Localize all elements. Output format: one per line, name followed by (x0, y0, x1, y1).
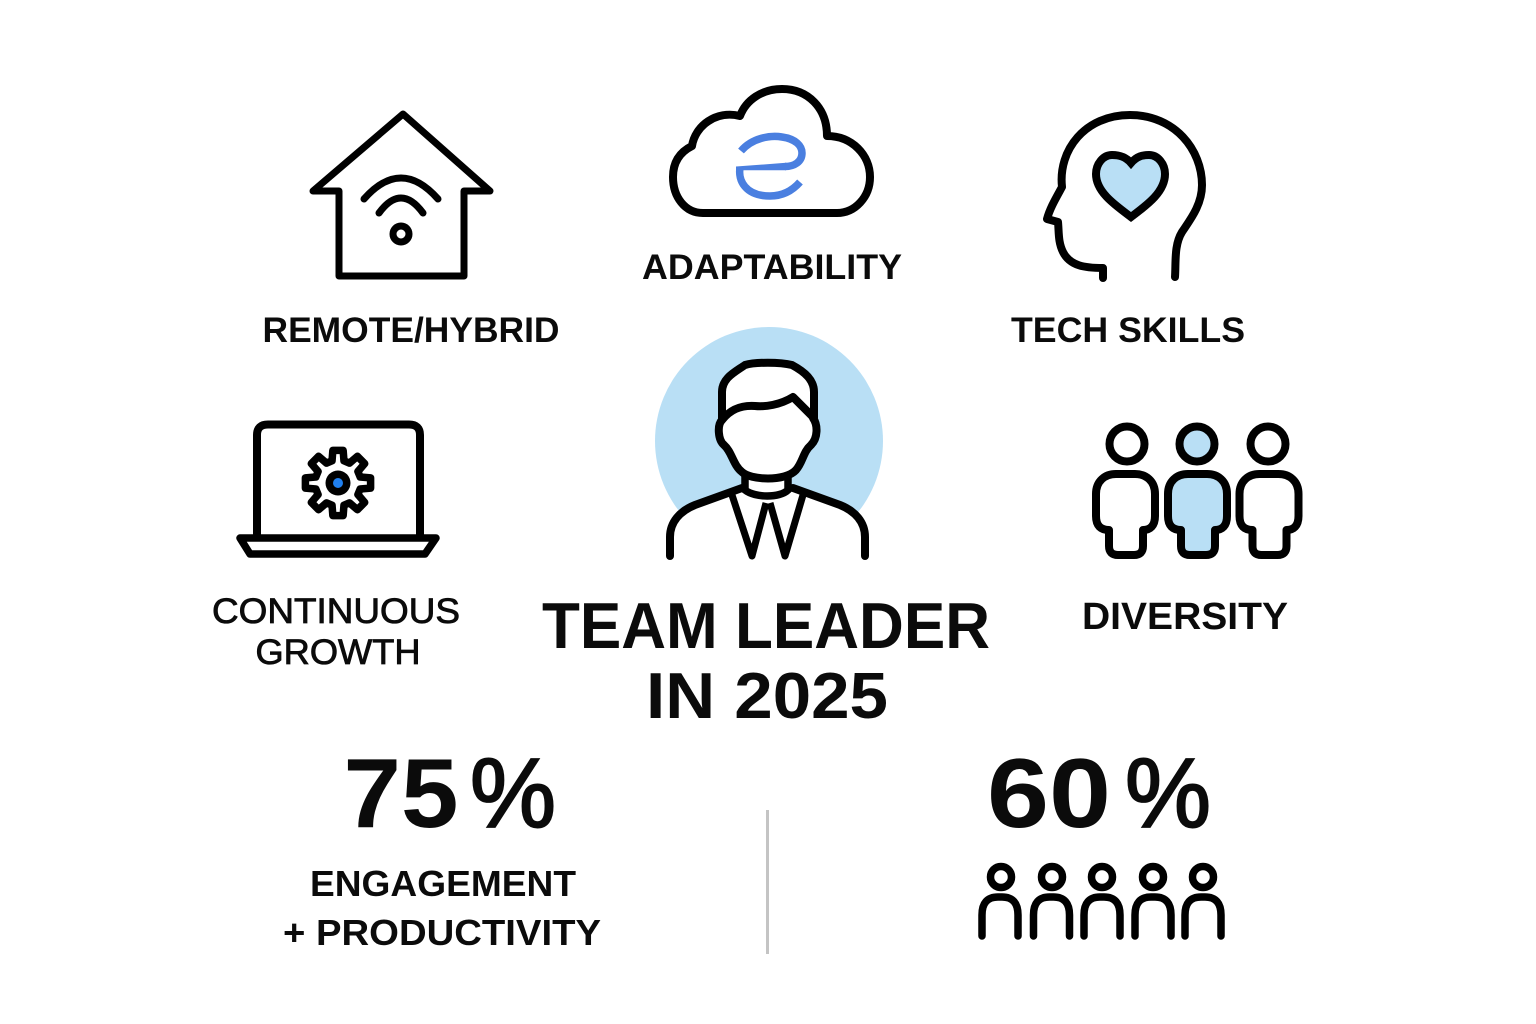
label: engagement + productivity: ENGAGEMENT (310, 863, 576, 904)
icon: cloud with arrows (673, 89, 870, 213)
label: continuous growth: CONTINUOUS (212, 592, 460, 631)
label: continuous growth: GROWTH (256, 633, 420, 672)
label: tech skills: TECH SKILLS (1011, 311, 1245, 350)
stat: 75% (344, 738, 556, 848)
title: TEAM LEADER (542, 589, 990, 662)
stat: 60%: 60 (987, 738, 1111, 848)
icon: head with heart (1047, 115, 1202, 278)
stat: 75%: % (470, 738, 556, 848)
icon: row of five people (982, 866, 1221, 936)
icon: team leader (655, 327, 883, 556)
divider (766, 810, 769, 954)
stat: 60% (987, 738, 1211, 848)
label: remote/hybrid: REMOTE/HYBRID (262, 311, 560, 350)
stat: 60%: % (1125, 738, 1211, 848)
icon: laptop with gear (240, 424, 436, 554)
label: adaptability: ADAPTABILITY (642, 248, 902, 287)
label: diversity: DIVERSITY (1082, 596, 1288, 638)
stat: 75%: 75 (344, 738, 458, 848)
icon: diversity group (1096, 426, 1298, 555)
label: engagement + productivity: + PRODUCTIVITY (283, 912, 601, 953)
icon: home with wifi (313, 114, 490, 276)
title: IN 2025 (646, 659, 888, 732)
